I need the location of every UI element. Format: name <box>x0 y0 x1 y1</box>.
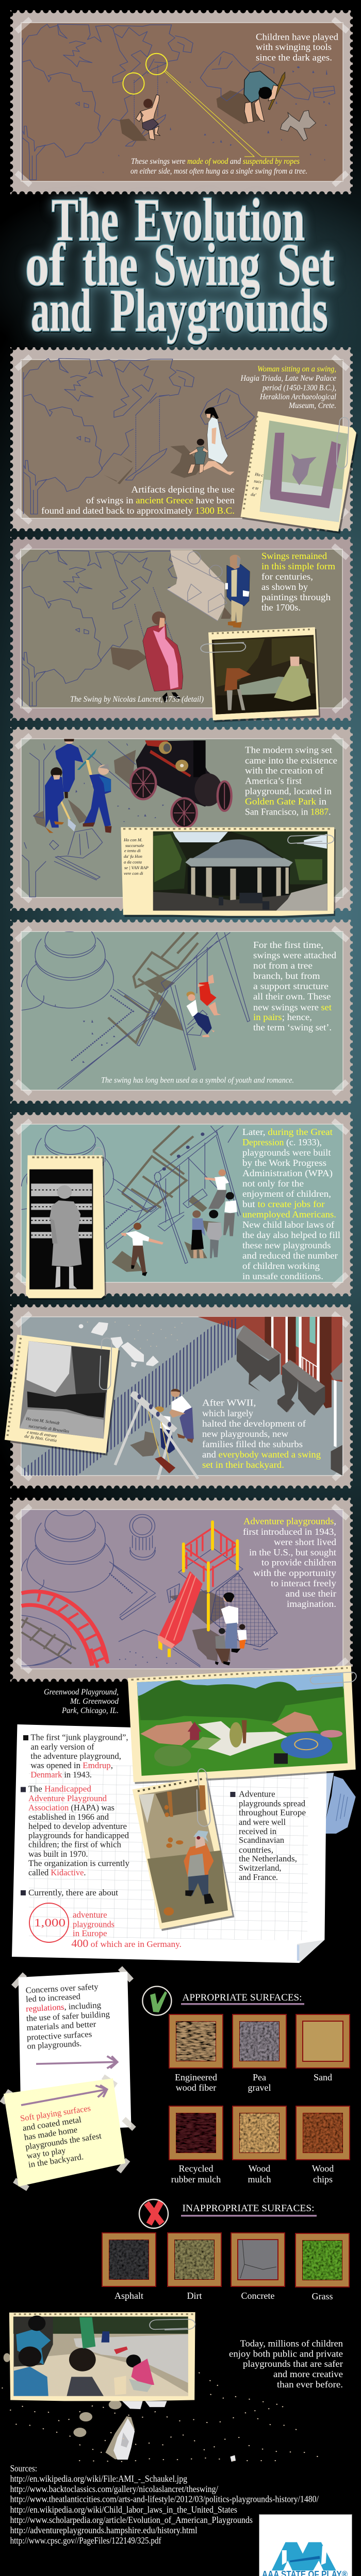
icon: red cross <box>139 2199 168 2228</box>
bullet: HAPA <box>21 1784 130 1877</box>
text: swings remained: Swings remained <box>261 551 327 561</box>
caption: Greenwood Playground: Park, Chicago, IL. <box>61 1706 119 1715</box>
note: child labor photo <box>26 1147 106 1300</box>
text: adventure playgrounds introduced: imagination. <box>287 1599 336 1609</box>
text: concerns over safety: regulations, including <box>26 2000 101 2013</box>
bullet: junk playground: The first “junk playground”, <box>30 1732 128 1742</box>
folded corner <box>297 1940 324 1963</box>
sources list <box>10 2463 319 2546</box>
text: children have played: Children have played <box>256 32 338 42</box>
icon: green check <box>142 1987 171 2015</box>
note: Golden Gate Park photo <box>121 827 336 918</box>
illustration: tiered outline and swing set <box>22 926 250 1089</box>
text: soft playing surfaces: Soft playing surfaces <box>20 2103 91 2123</box>
bullet: junk playground <box>23 1732 128 1780</box>
text: today millions of children: enjoy both public and private <box>229 2348 343 2359</box>
text: adventure playgrounds introduced: first introduced in 1943, <box>243 1527 336 1537</box>
caption: painting credit: The Swing by Nicolas Lancret, 1735 (detail) <box>70 695 204 704</box>
tile: wood mulch: Wood <box>249 2163 270 2174</box>
tile: sand <box>296 2014 350 2082</box>
bullet: spread through Europe: the Netherlands, <box>239 1854 297 1863</box>
bullet: HAPA: established in 1966 and <box>28 1812 109 1822</box>
bullet: currently 1,000: Currently, there are about <box>28 1888 118 1897</box>
text: Great Depression playgrounds: but to create jobs for <box>242 1199 325 1209</box>
handwritten note text: e tento di <box>124 848 141 853</box>
panel: adventure playgrounds <box>10 1498 353 1682</box>
tape strips on yellow note <box>2 2077 134 2189</box>
section: appropriate surfaces <box>142 1987 350 2184</box>
handwritten note text: da' fu Hon <box>124 854 142 859</box>
text: today millions of children: and more creative <box>273 2369 343 2379</box>
bullet: junk playground: Denmark in 1943. <box>30 1770 92 1780</box>
panel background <box>21 360 343 518</box>
tile: dirt: Dirt <box>187 2291 202 2301</box>
tile: dirt <box>168 2233 221 2301</box>
panel background <box>21 931 343 1090</box>
text: today millions of children: Today, millions of children <box>240 2338 343 2348</box>
caption: woman sitting on a swing: Hagia Triada, Late New Palace <box>240 374 336 383</box>
bullet: spread through Europe: and were well <box>239 1817 286 1827</box>
text: artifacts depicting swings: found and dated back to approximately 1300 B.C. <box>41 505 235 516</box>
corner tape <box>17 357 348 522</box>
bullet: currently 1,000 <box>21 1888 182 1950</box>
bullet: HAPA: playgrounds for handicapped <box>28 1831 129 1840</box>
text: first time attached: not from a tree <box>253 960 313 971</box>
text: adventure playgrounds introduced: with the opportunity <box>253 1568 336 1578</box>
text: first time attached: branch, but from <box>253 971 320 981</box>
text: adventure playgrounds introduced <box>243 1516 336 1609</box>
text: Great Depression playgrounds: not only for the <box>242 1178 304 1189</box>
text: modern swing set: The modern swing set <box>245 745 332 755</box>
panel background <box>21 1124 343 1282</box>
text: artifacts depicting swings <box>41 484 235 516</box>
text: first time attached: swings were attached <box>253 950 336 960</box>
text: after WWII: and everybody wanted a swing <box>202 1449 321 1460</box>
handwritten note text: e te <box>252 485 259 491</box>
note: safety concerns <box>2 1968 134 2189</box>
panel background <box>21 1510 343 1669</box>
title: the <box>83 231 138 298</box>
tile: concrete <box>231 2233 285 2301</box>
handwritten note: Ho con M. Schmidt: da' fu Hoti. Gratia <box>24 1433 57 1443</box>
sources list: http://adventureplaygrounds.hampshire.edu/history.html <box>10 2525 198 2535</box>
text: adventure playgrounds introduced: to provide children <box>261 1557 336 1568</box>
panel: swing sets in pairs <box>10 920 353 1104</box>
panel: simple swings through the 1700s <box>10 537 353 722</box>
caption: woman sitting on a swing: period (1450-1300 B.C.), <box>262 383 336 393</box>
handwritten note text: succursale <box>125 843 144 848</box>
text: soft playing surfaces: and coated metal <box>22 2114 82 2133</box>
handwritten note text: a da costa <box>124 859 142 865</box>
bullet: spread through Europe: and France. <box>239 1872 278 1882</box>
text: concerns over safety: the use of safer building <box>26 2009 110 2023</box>
grid lines <box>29 1762 308 1940</box>
heading: inappropriate surfaces: INAPPROPRIATE SURFACES: <box>183 2203 315 2214</box>
caption: symbol of youth: The swing has long been used as a symbol of youth and romance. <box>101 1076 294 1085</box>
arrow: purple on yellow note <box>21 2085 107 2105</box>
panel background <box>21 1317 343 1476</box>
text: after WWII: families filled the suburbs <box>202 1439 303 1449</box>
title <box>25 186 334 344</box>
text: Great Depression playgrounds: Later, during the Great <box>242 1127 333 1137</box>
tile: grass <box>296 2233 349 2301</box>
text: first time attached: in pairs; hence, <box>253 1012 312 1022</box>
bullet: spread through Europe: Switzerland, <box>239 1863 282 1873</box>
note: Greek swing artifact photo <box>240 411 358 534</box>
stamp frame <box>10 1112 353 1296</box>
bullet: HAPA: children; the first of which <box>28 1840 122 1850</box>
sources list: http://www.backtoclassics.com/gallery/nicolaslancret/theswing/ <box>10 2484 218 2494</box>
handwritten note text: da' <box>251 492 257 497</box>
stamp frame <box>10 10 353 194</box>
title: of <box>25 231 65 298</box>
text: today millions of children <box>229 2338 343 2389</box>
bullet: spread through Europe <box>230 1789 306 1882</box>
bullet: spread through Europe: Scandinavian <box>239 1835 284 1845</box>
panel: post-war backyards <box>5 1304 353 1488</box>
text: children have played <box>256 32 338 63</box>
text: soft playing surfaces: playgrounds the safest <box>25 2131 102 2151</box>
corner tape <box>17 928 348 1094</box>
tile: wood chips: chips <box>313 2174 333 2184</box>
text: modern swing set: San Francisco, in 1887. <box>245 807 331 817</box>
text: children have played: since the dark ages. <box>256 53 332 63</box>
logo: AAA State of Play <box>259 2514 352 2576</box>
text: soft playing surfaces <box>20 2103 102 2170</box>
note: The Swing painting <box>201 627 320 722</box>
text: first time attached: new swings were set <box>253 1002 332 1012</box>
bullet: spread through Europe: throughout Europe <box>239 1807 306 1818</box>
illustration: workers and steam engine <box>22 735 232 897</box>
text: first time attached <box>253 940 336 1032</box>
bullet: currently 1,000: in Europe <box>73 1928 107 1938</box>
illustration: rocks and scattered pebbles <box>2 2353 320 2462</box>
text: after WWII: set in their backyard. <box>202 1460 284 1470</box>
text: modern swing set <box>245 745 337 817</box>
sources list: http://www.scholarpedia.org/article/Evolution_of_American_Playgrounds <box>10 2515 253 2525</box>
tile: pea gravel: gravel <box>248 2082 271 2093</box>
illustration: swing set and children <box>22 1125 240 1276</box>
tile: concrete: Concrete <box>241 2291 274 2301</box>
illustration: tree, woman and child <box>24 359 254 514</box>
sources list: http://en.wikipedia.org/wiki/Child_labor_laws_in_the_United_States <box>10 2504 237 2515</box>
panel background <box>21 739 343 897</box>
arrow: purple pointing right <box>36 2056 118 2069</box>
bullet: HAPA: The Handicapped <box>28 1784 92 1794</box>
panel background <box>21 23 343 181</box>
title: The <box>52 186 119 253</box>
bullet: HAPA: was built in 1970. <box>28 1849 88 1859</box>
panel: graph paper facts <box>12 1724 327 1963</box>
text: after WWII <box>202 1397 321 1470</box>
sources list: http://en.wikipedia.org/wiki/File:AMI_-_Schaukel.jpg <box>10 2473 187 2484</box>
tile: asphalt <box>102 2233 156 2301</box>
caption: woman sitting on a swing: Museum, Crete. <box>288 401 336 410</box>
text: artifacts depicting swings: of swings in ancient Greece have been <box>86 495 235 505</box>
handwritten note: Ho con M. Schmidt <box>24 1416 70 1443</box>
bullet: HAPA: Adventure Playground <box>28 1793 107 1803</box>
stamp frame <box>10 347 353 531</box>
tile: wood chips <box>296 2106 350 2184</box>
bullet: HAPA: called Kidactive. <box>28 1868 86 1877</box>
corner tape <box>17 546 348 711</box>
caption: swings made of wood <box>130 157 307 176</box>
bullet: spread through Europe: playgrounds spread <box>239 1799 306 1808</box>
caption: swings made of wood: on either side, most often hung as a single swing from a tree. <box>130 167 307 176</box>
bullet: junk playground: an early version of <box>30 1742 94 1752</box>
handwritten note text: se | VAN RAP <box>124 865 149 870</box>
tile: grass: Grass <box>311 2291 333 2301</box>
text: concerns over safety: Concerns over safety <box>25 1981 99 1995</box>
text: after WWII: new playgrounds, new <box>202 1429 288 1439</box>
corner tape <box>17 1313 348 1479</box>
stamp circle: 1,000: 1,000 <box>34 1916 65 1929</box>
text: modern swing set: Golden Gate Park in <box>245 796 326 807</box>
illustration: family lower half, slide base and dots <box>30 1649 268 1668</box>
caption: woman sitting on a swing <box>240 365 336 410</box>
tile: pea gravel <box>233 2014 286 2093</box>
caption: woman sitting on a swing: Woman sitting on a swing, <box>257 365 336 374</box>
panel background <box>21 549 342 708</box>
text: swings remained: as shown by <box>261 582 308 592</box>
tile: wood mulch <box>233 2106 286 2184</box>
text: adventure playgrounds introduced: were short lived <box>274 1537 336 1547</box>
tile: wood mulch: mulch <box>248 2174 271 2184</box>
text: Great Depression playgrounds: of children working <box>242 1261 320 1271</box>
caption: swings made of wood: These swings were made of wood and suspended by ropes <box>131 157 300 166</box>
bullet: spread through Europe: countries, <box>239 1845 273 1855</box>
text: concerns over safety: protective surfaces <box>26 2029 92 2042</box>
tile: asphalt: Asphalt <box>114 2291 143 2301</box>
stamp frame <box>10 537 353 721</box>
text: after WWII: halted the development of <box>202 1418 306 1429</box>
white note sheet <box>19 1972 132 2132</box>
handwritten note text: vere con di <box>124 871 143 876</box>
handwritten note: Ho con M. Schmidt: Ho con M. Schmidt <box>25 1416 60 1426</box>
text: Great Depression playgrounds: Administration (WPA) <box>242 1168 333 1179</box>
text: swings remained: the 1700s. <box>261 602 301 613</box>
illustration: tree, gazebo, gentleman and woman on swing <box>22 550 250 706</box>
text: Great Depression playgrounds: by the Work Progress <box>242 1158 326 1168</box>
text: after WWII: which largely <box>202 1408 253 1418</box>
bullet: HAPA: The organization is currently <box>28 1858 130 1868</box>
stamp frame <box>10 1498 353 1682</box>
sources list: http://www.cpsc.gov//PageFiles/122149/325.pdf <box>10 2535 161 2546</box>
panel: first American playground <box>10 727 353 918</box>
text: after WWII: After WWII, <box>202 1397 256 1408</box>
text: children have played: with swinging tools <box>256 42 332 52</box>
yellow note sheet <box>4 2078 125 2187</box>
caption: Greenwood Playground <box>44 1688 119 1715</box>
panel: Great Depression playgrounds <box>10 1112 353 1300</box>
text: today millions of children: than ever before. <box>277 2379 343 2389</box>
text: concerns over safety: materials and better <box>26 2019 96 2032</box>
caption: Greenwood Playground: Mt. Greenwood <box>70 1697 119 1706</box>
caption: Greenwood Playground: Greenwood Playground, <box>44 1688 119 1697</box>
text: soft playing surfaces: in the backyard. <box>28 2151 84 2170</box>
text: adventure playgrounds introduced: and use their <box>286 1588 336 1599</box>
text: modern swing set: America’s first <box>245 776 302 786</box>
text: artifacts depicting swings: Artifacts depicting the use <box>131 484 235 495</box>
panel: dark ages swings <box>10 10 353 194</box>
tile: recycled rubber mulch: rubber mulch <box>171 2174 221 2184</box>
text: first time attached: all their own. These <box>253 991 331 1002</box>
handwritten note text <box>123 837 149 876</box>
text: adventure playgrounds introduced: in the U.S., but sought <box>249 1547 336 1557</box>
tile: engineered wood fiber: Engineered <box>175 2072 217 2082</box>
title: Swing <box>154 231 260 298</box>
note: Greenwood Playground photo <box>128 1666 357 1784</box>
text: first time attached: a support structure <box>253 981 329 991</box>
tile: engineered wood fiber <box>169 2014 223 2093</box>
illustration: play tower, slide, hoop and family <box>22 1510 277 1666</box>
text: swings remained: for centuries, <box>261 571 313 582</box>
bullet: currently 1,000: playgrounds <box>73 1920 114 1929</box>
tape strips <box>13 1968 132 1987</box>
bullet: spread through Europe: received in <box>239 1826 276 1836</box>
caption: woman sitting on a swing: Heraklion Archaeological <box>259 393 336 401</box>
note: tenement yard photo <box>5 1335 120 1455</box>
text: today millions of children: playgrounds that are safer <box>243 2359 343 2369</box>
bullet: HAPA: helped to develop adventure <box>28 1821 127 1831</box>
text: soft playing surfaces: has made home <box>24 2125 78 2142</box>
stamp frame <box>10 1304 353 1488</box>
text: soft playing surfaces: way to play <box>26 2145 67 2161</box>
illustration: tree, child on swing, man and goat <box>22 24 335 180</box>
panel: ancient Greece artifacts <box>10 347 358 534</box>
text: Great Depression playgrounds: New child labor laws of <box>242 1219 334 1230</box>
tile: engineered wood fiber: wood fiber <box>176 2082 216 2093</box>
stamp frame <box>10 727 353 911</box>
bullet: junk playground: was opened in Emdrup, <box>30 1760 113 1770</box>
bullet: currently 1,000: 400 of which are in Germany. <box>71 1937 182 1950</box>
note: child with pumpkins photo <box>133 1769 234 1931</box>
text: first time attached: the term ‘swing set’. <box>253 1022 332 1032</box>
text: first time attached: For the first time, <box>253 940 323 950</box>
text: Great Depression playgrounds: Depression (c. 1933), <box>242 1137 322 1148</box>
corner tape <box>17 1506 348 1672</box>
text: adventure playgrounds introduced: to interact freely <box>271 1578 336 1588</box>
corner tape <box>17 1121 348 1286</box>
text: Great Depression playgrounds: and reduced the number <box>242 1250 338 1261</box>
title: Set <box>277 231 334 298</box>
yellow highlight circles and leader lines <box>123 54 299 157</box>
corner tape <box>17 735 348 901</box>
bullet: spread through Europe: Adventure <box>239 1789 275 1799</box>
paper sheet <box>12 1724 327 1963</box>
text: Great Depression playgrounds <box>242 1127 340 1281</box>
bullet: junk playground: the adventure playground, <box>30 1751 121 1761</box>
handwritten note: Ho con M. Schmidt: succursale di Bruxelles <box>28 1423 70 1434</box>
text: adventure playgrounds introduced: Adventure playgrounds , <box>243 1516 336 1527</box>
text: Great Depression playgrounds: these new playgrounds <box>242 1240 331 1250</box>
corner tape <box>17 19 348 185</box>
text: Great Depression playgrounds: playgrounds were built <box>242 1147 331 1158</box>
text: modern swing set: playground, located in <box>245 786 332 796</box>
title: and <box>31 277 91 344</box>
text: concerns over safety: led to increased <box>26 1991 81 2004</box>
handwritten note text <box>251 471 264 497</box>
text: modern swing set: with the creation of <box>245 766 323 776</box>
stamp frame <box>10 920 353 1104</box>
icon: blue clipboard clip <box>314 1773 356 1840</box>
section: inappropriate surfaces <box>102 2199 349 2301</box>
tile: recycled rubber mulch <box>169 2106 223 2184</box>
text: Great Depression playgrounds: unemployed Americans. <box>242 1209 336 1219</box>
text: Great Depression playgrounds: the day also helped to fill <box>242 1230 340 1240</box>
handwritten note text: Ho c <box>254 471 264 478</box>
heading: appropriate surfaces: APPROPRIATE SURFACES: <box>183 1992 302 2003</box>
tile: pea gravel: Pea <box>253 2072 266 2082</box>
text: Great Depression playgrounds: in unsafe conditions. <box>242 1271 323 1281</box>
sources list: Sources: <box>10 2463 37 2473</box>
text: concerns over safety <box>25 1981 110 2051</box>
sources list: http://www.theatlanticcities.com/arts-and-lifestyle/2012/03/politics-playgrounds-history/1480/ <box>10 2494 319 2504</box>
text: swings remained: paintings through <box>261 592 331 602</box>
handwritten note text: Ho con M. <box>123 837 142 842</box>
stamp circle: 1,000 <box>29 1903 69 1942</box>
text: swings remained: in this simple form <box>261 561 335 571</box>
text: Great Depression playgrounds: enjoyment of children, <box>242 1189 331 1199</box>
tile: sand: Sand <box>314 2072 332 2082</box>
tile: recycled rubber mulch: Recycled <box>179 2163 213 2174</box>
illustration: house, fence and backyard swing <box>24 1317 342 1480</box>
text: concerns over safety: on playgrounds. <box>27 2038 82 2051</box>
bullet: HAPA: Association (HAPA) was <box>28 1803 114 1812</box>
tile: wood chips: Wood <box>312 2163 334 2174</box>
note: sandbox photo <box>9 2312 195 2401</box>
text: modern swing set: came into the existence <box>245 755 337 766</box>
handwritten note: Ho con M. Schmidt: e tento di entrare <box>27 1429 57 1438</box>
handwritten note text: succ <box>254 478 262 484</box>
text: swings remained <box>261 551 335 613</box>
bullet: currently 1,000: adventure <box>73 1910 107 1920</box>
